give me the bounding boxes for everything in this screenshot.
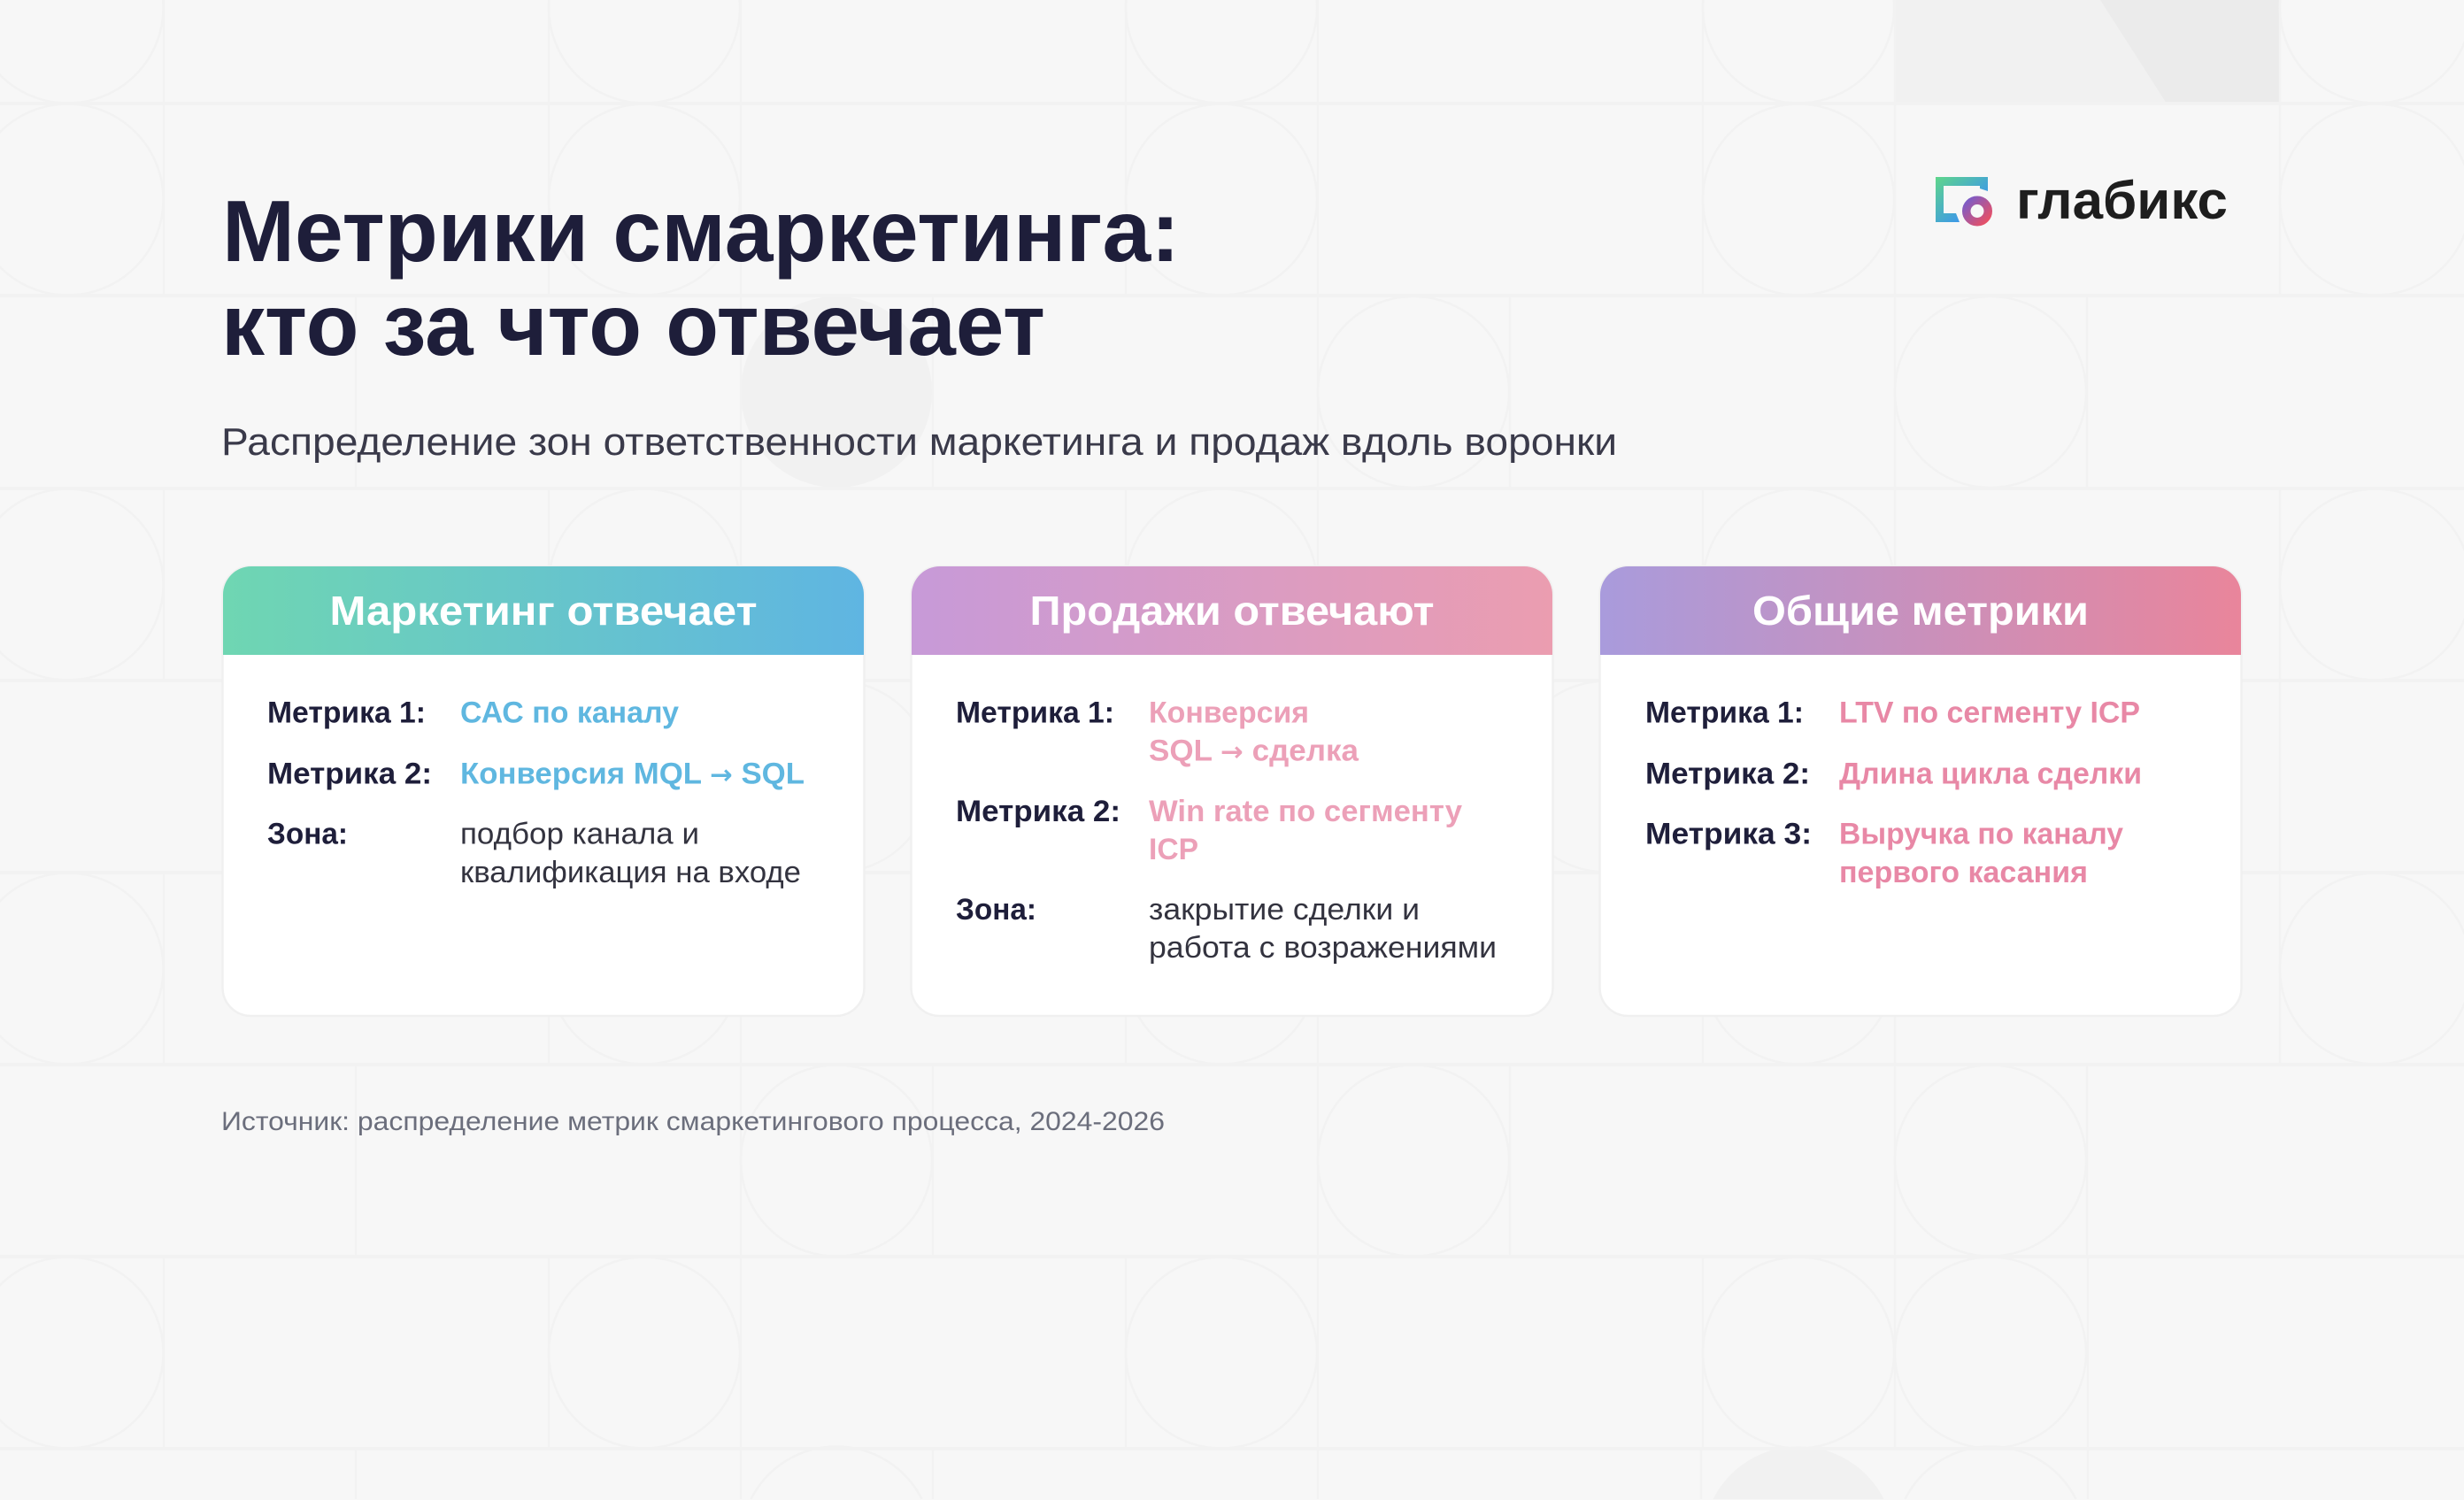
row: metric 1: Метрика 1: (267, 696, 426, 729)
row: metric 1: Метрика 1: (956, 696, 1114, 729)
source note: Источник: распределение метрик смаркетингового процесса, 2024-2026 (221, 1107, 1165, 1136)
row: metric 1 (267, 696, 679, 729)
panel header: Маркетинг отвечает (223, 566, 864, 655)
row: metric 1: Метрика 1: (1645, 696, 1804, 729)
row: zone: закрытие сделки и (1149, 893, 1420, 927)
row: zone: квалификация на входе (460, 856, 801, 889)
panel header: Маркетинг отвечает: Маркетинг отвечает (329, 588, 758, 634)
panel: Маркетинг отвечает (223, 566, 864, 1016)
title: Метрики смаркетинга: (222, 182, 1180, 280)
row: metric 2 (1645, 758, 2142, 791)
panel: Продажи отвечают (912, 566, 1552, 1016)
title (221, 182, 1180, 373)
row: metric 1 (956, 696, 1359, 768)
row: zone (267, 818, 801, 889)
row: metric 2: Метрика 2: (956, 795, 1120, 828)
logo wordmark: глабикс (2016, 171, 2228, 230)
row: metric 1: Конверсия (1149, 696, 1309, 729)
panel header: Продажи отвечают (912, 566, 1552, 655)
logo: глабикс (1936, 171, 2228, 230)
row: zone: Зона: (267, 818, 348, 851)
row: zone: подбор канала и (460, 818, 699, 851)
row: metric 2 (956, 795, 1462, 866)
row: metric 1: LTV по сегменту ICP (1839, 696, 2140, 729)
row: zone: Зона: (956, 893, 1036, 927)
panel: Общие метрики (1600, 566, 2241, 1016)
row: metric 2: Метрика 2: (267, 758, 432, 791)
row: metric 3: Выручка по каналу (1839, 818, 2123, 851)
row: metric 1: SQL → сделка (1149, 735, 1359, 768)
row: metric 2: Метрика 2: (1645, 758, 1810, 791)
panel header: Общие метрики: Общие метрики (1752, 588, 2089, 634)
subtitle: Распределение зон ответственности маркетинга и продаж вдоль воронки (221, 420, 1617, 464)
row: metric 2: Конверсия MQL → SQL (460, 758, 805, 791)
row: metric 2: ICP (1149, 833, 1198, 866)
row: metric 2 (267, 758, 805, 791)
panel header: Общие метрики (1600, 566, 2241, 655)
panel header: Продажи отвечают: Продажи отвечают (1030, 588, 1434, 634)
title: кто за что отвечает (221, 276, 1045, 373)
row: metric 1 (1645, 696, 2140, 729)
row: metric 2: Длина цикла сделки (1839, 758, 2142, 791)
icon: logo mark (1936, 177, 1988, 222)
row: metric 3 (1645, 818, 2123, 889)
row: metric 3: Метрика 3: (1645, 818, 1812, 851)
row: metric 3: первого касания (1839, 856, 2088, 889)
row: metric 1: САС по каналу (460, 696, 679, 729)
row: zone (956, 893, 1497, 965)
row: zone: работа с возражениями (1149, 931, 1497, 965)
row: metric 2: Win rate по сегменту (1149, 795, 1462, 828)
